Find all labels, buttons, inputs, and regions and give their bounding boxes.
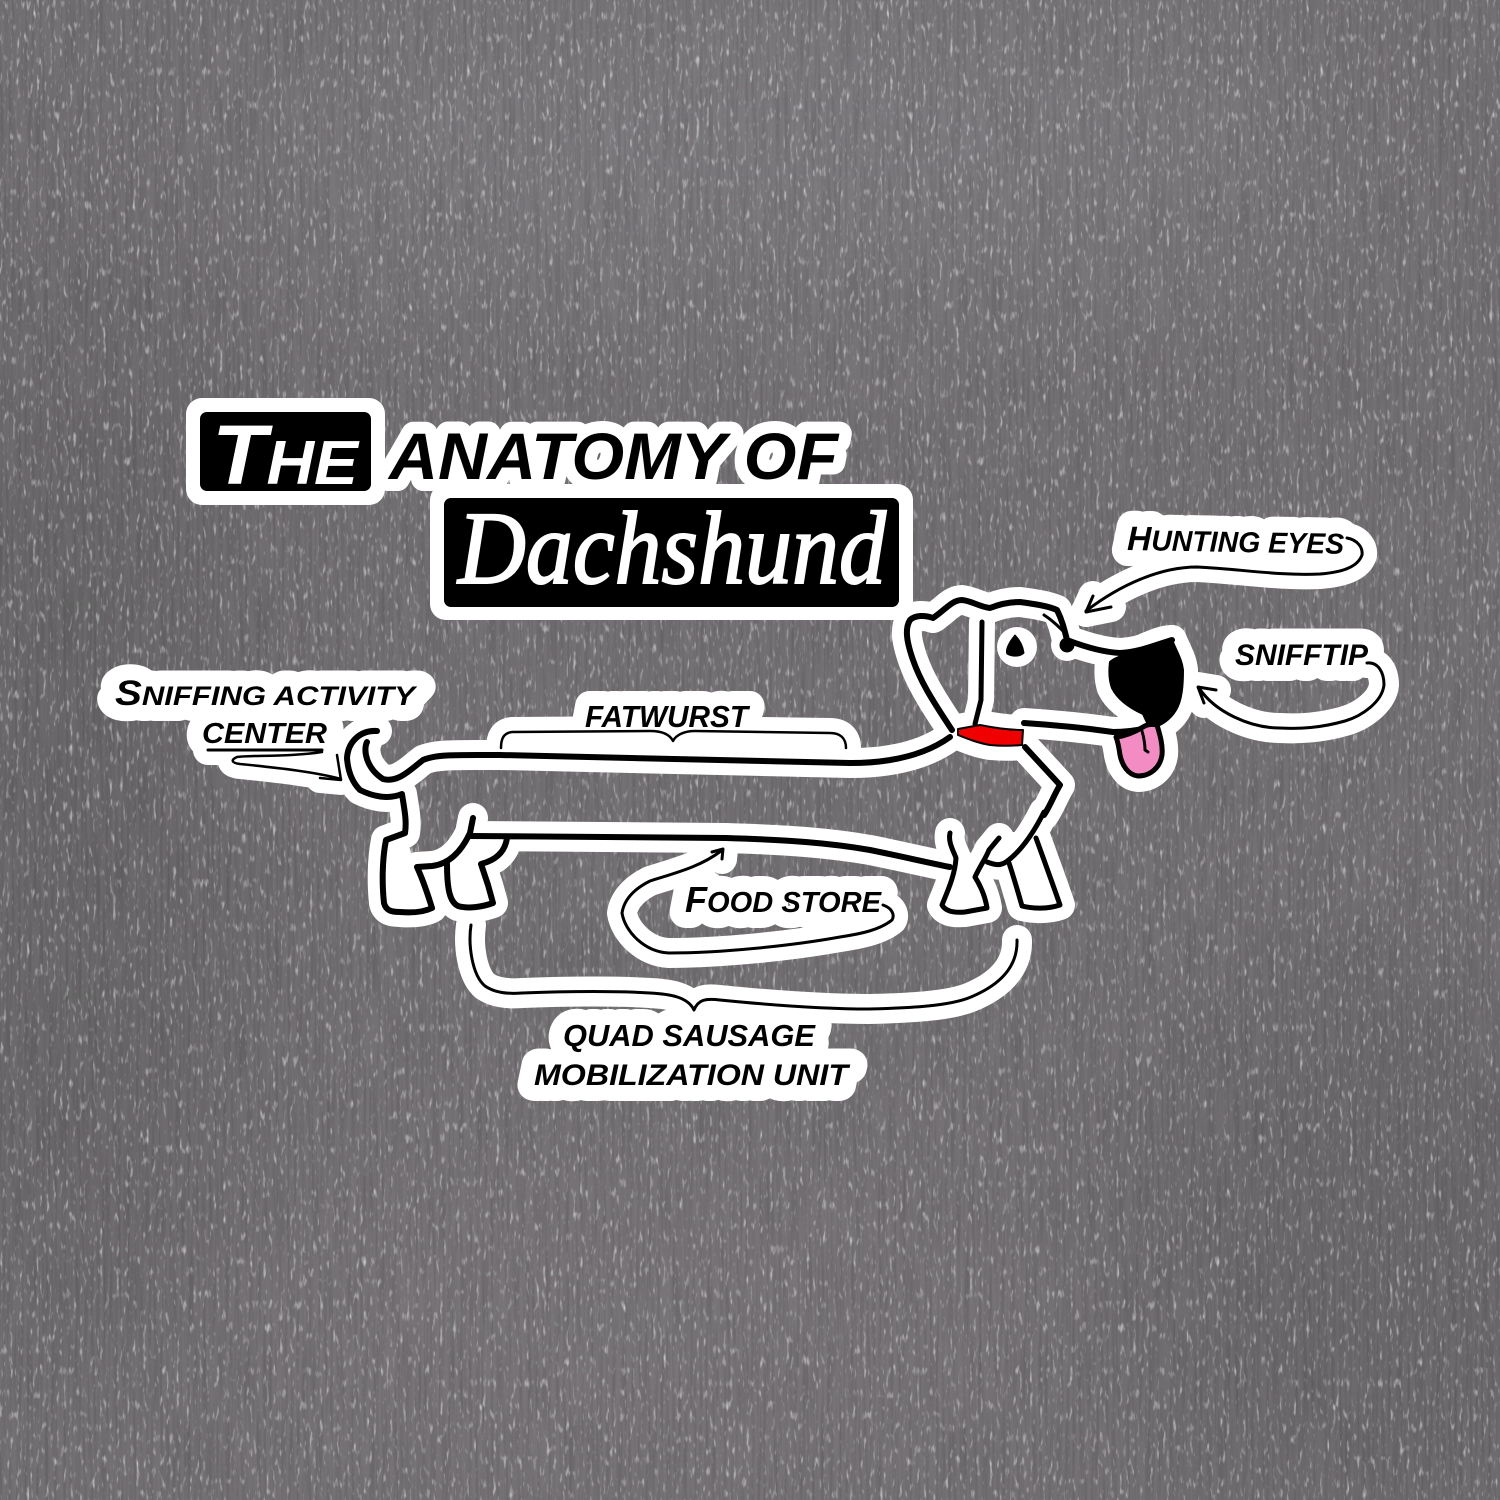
icon: nose bridge dot [1060,638,1074,652]
arrow: sniffing activity center [233,752,341,780]
callout: Quad sausage mobilization unit: QUAD SAUSAGE [563,1018,816,1053]
nose patch [1109,640,1183,729]
collar [958,725,1023,746]
tail, back and rear leg [347,731,950,912]
callout: Sniffing activity center [115,674,418,780]
lower jaw [1024,723,1150,732]
icon: eye [1006,635,1024,656]
callout: Sniffing activity center: CENTER [202,718,327,750]
eye and nose-bridge fills [997,627,1037,667]
white sticker outline behind the artwork [115,398,1384,1092]
arrow: food store [622,849,893,953]
callout: Hunting eyes [1086,520,1362,612]
ear divider [975,622,982,724]
tongue crease [1142,731,1148,752]
far front leg and chest [987,812,1060,908]
callout: Quad sausage mobilization unit: MOBILIZATION UNIT [534,1059,851,1092]
dachshund illustration [347,600,1183,912]
front leg [942,833,999,912]
neck [1025,747,1060,815]
brow [1044,615,1064,632]
callout: Fatwurst [501,699,846,748]
callout: Snifftip [1198,639,1384,728]
title line: Anatomy of: ANATOMY OF [387,419,840,493]
arrow: snifftip [1198,663,1384,728]
callout: Quad sausage mobilization unit [470,925,1017,1092]
foot and leg fills [389,830,1058,910]
title [200,408,899,607]
underline [208,748,322,752]
callout: Food store [622,849,893,953]
callout: Sniffing activity center: SNIFFING ACTIVITY [115,674,418,713]
head and ear outline [907,600,1172,730]
belly and rear inner leg [447,836,950,907]
title badge: The: THE [212,408,360,502]
arrow: hunting eyes [1086,538,1362,612]
callout: Snifftip: SNIFFTIP [1235,639,1369,672]
callout: Food store: FOOD STORE [685,879,883,920]
tongue [1116,724,1162,776]
callout: Hunting eyes: HUNTING EYES [1127,520,1345,562]
brace: legs [470,925,1017,1010]
title badge: Dachshund: Dachshund [456,491,887,606]
callout: Fatwurst: FATWURST [585,699,751,734]
brace: fatwurst [501,731,846,748]
